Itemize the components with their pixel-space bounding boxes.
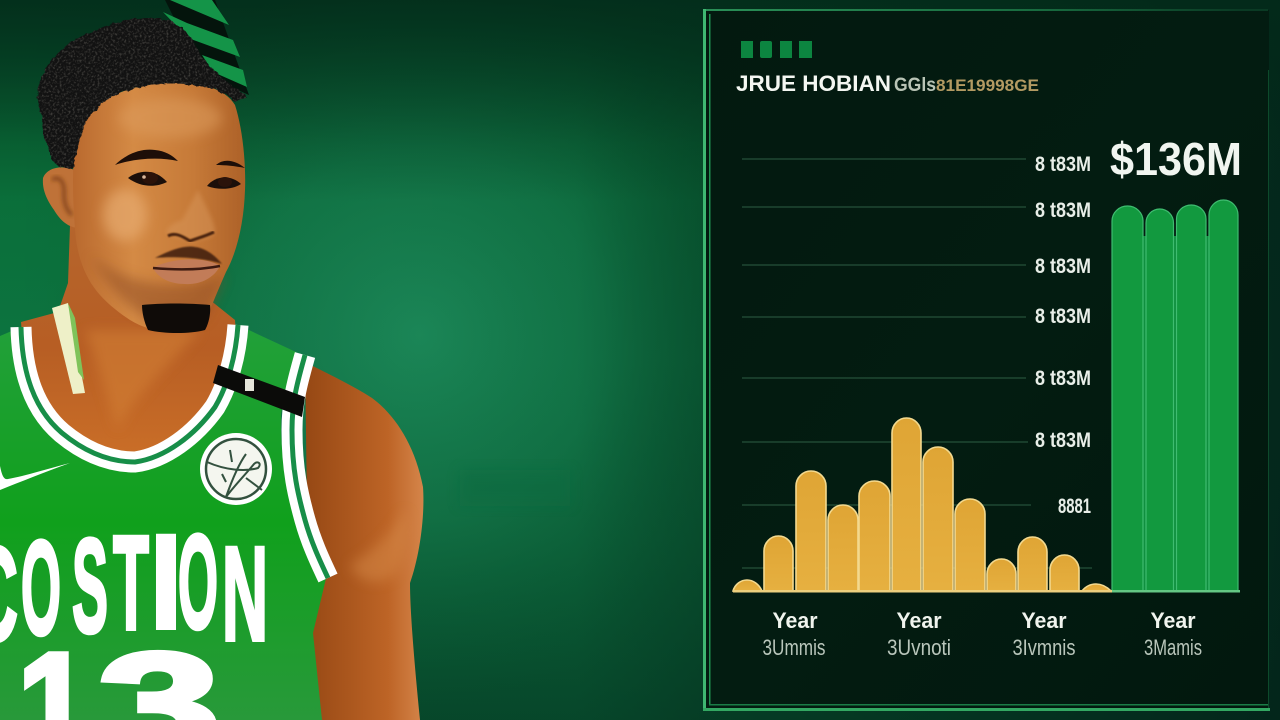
nose <box>166 190 215 242</box>
left eye <box>128 172 167 186</box>
y-axis labels <box>1035 153 1091 518</box>
jersey wordmark: T <box>113 509 149 658</box>
y-axis labels: 8 t83M <box>1035 153 1091 176</box>
x-axis labels: Year <box>1150 608 1196 633</box>
cheek highlight <box>103 189 147 241</box>
x-axis labels <box>762 608 1202 660</box>
jersey <box>0 325 328 720</box>
y-axis labels: 8 t83M <box>1035 429 1091 452</box>
moustache <box>155 247 222 264</box>
jersey wordmark: I <box>150 508 182 657</box>
hair <box>38 18 247 170</box>
y-axis labels: 8881 <box>1058 495 1091 518</box>
x-axis labels: 3Uvnoti <box>887 635 951 660</box>
y-axis labels: 8 t83M <box>1035 255 1091 278</box>
y-axis labels: 8 t83M <box>1035 199 1091 222</box>
neck streak <box>52 303 85 394</box>
bar chart: gold bars <box>733 418 1111 591</box>
x-axis labels: Year <box>896 608 942 633</box>
right eye <box>207 177 241 189</box>
mouth <box>153 259 220 284</box>
x-axis labels: 3Mamis <box>1144 635 1202 660</box>
forehead highlight <box>118 98 222 138</box>
jersey wordmark <box>0 508 268 669</box>
jersey wordmark: O <box>21 514 61 663</box>
heading <box>736 71 1039 96</box>
jaw shadow <box>90 255 225 320</box>
left eyebrow <box>115 150 178 165</box>
player arm <box>305 362 423 720</box>
icon: four green squares <box>741 41 812 58</box>
neck shading <box>85 330 200 430</box>
jersey number <box>18 624 220 720</box>
bar chart: green bars <box>1112 200 1238 591</box>
icon: jersey logo <box>200 433 272 505</box>
x-axis labels: 3Ummis <box>762 635 826 660</box>
goatee <box>142 304 210 333</box>
jersey wordmark: S <box>72 512 108 661</box>
right eyebrow <box>216 161 245 168</box>
ear detail <box>52 178 72 215</box>
player figure <box>0 0 423 720</box>
heading: JRUE HOBIAN <box>736 71 891 96</box>
heading: GGls <box>894 75 936 96</box>
x-axis labels: Year <box>772 608 818 633</box>
panel: earnings chart <box>703 9 1270 711</box>
jersey armhole trim <box>292 355 328 578</box>
x-axis labels: 3Ivmnis <box>1012 635 1076 660</box>
chart baseline <box>733 590 1240 592</box>
y-axis labels: 8 t83M <box>1035 305 1091 328</box>
y-axis labels: 8 t83M <box>1035 367 1091 390</box>
player neck and chest <box>21 225 238 470</box>
black shoulder strap <box>213 365 305 417</box>
jersey wordmark: O <box>178 508 218 657</box>
chart grid lines <box>742 159 1092 568</box>
jersey collar <box>21 325 238 462</box>
icon: swoosh <box>0 463 70 490</box>
face <box>73 82 245 333</box>
ear <box>43 167 80 228</box>
icon: green and black stripes <box>163 0 249 95</box>
jersey: N <box>222 520 268 669</box>
callout: $136M: $136M <box>1110 133 1242 185</box>
arm highlight <box>350 510 407 582</box>
x-axis labels: Year <box>1022 608 1067 633</box>
heading: 81E19998GE <box>936 76 1039 95</box>
